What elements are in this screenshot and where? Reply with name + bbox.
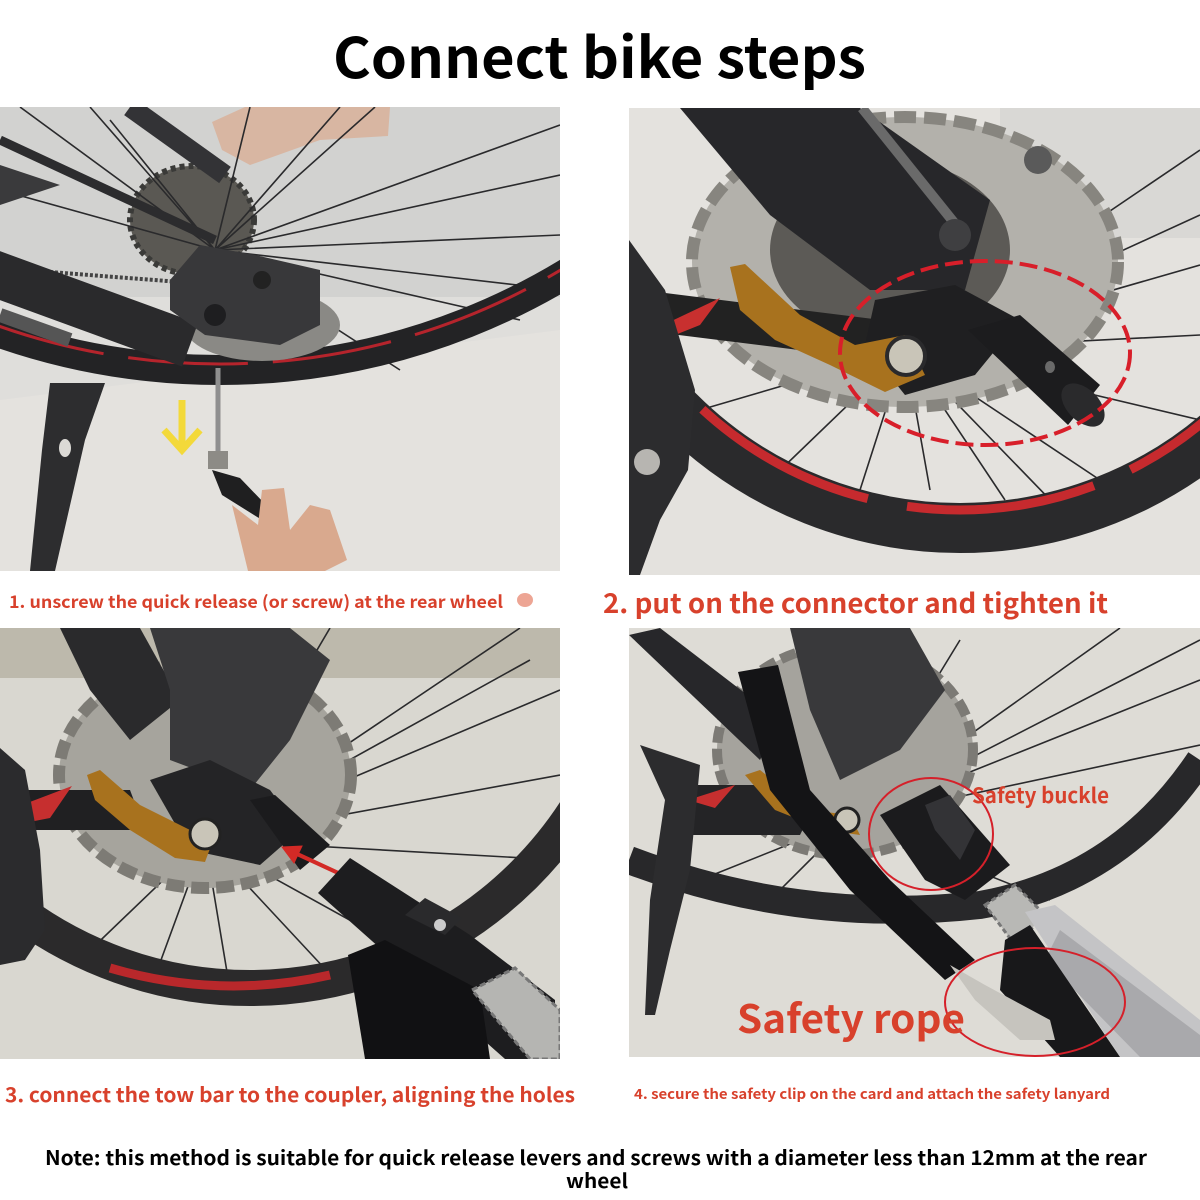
brake disc xyxy=(192,301,340,361)
label: safety rope: Safety rope xyxy=(737,989,965,1045)
gold lever xyxy=(87,770,215,862)
panel: step 1 photo xyxy=(0,107,560,571)
caption: step 1: 1. unscrew the quick release (or screw) at the rear wheel xyxy=(9,588,503,613)
velcro strap xyxy=(348,940,490,1059)
spokes xyxy=(0,107,560,370)
cassette sprocket xyxy=(130,166,254,274)
gold lever xyxy=(745,770,860,835)
kickstand xyxy=(0,748,45,965)
safety clip xyxy=(406,898,454,935)
note: Note: this method is suitable for quick release levers and screws with a diameter less than 12mm at the rear xyxy=(45,1142,1147,1171)
chain xyxy=(50,272,180,282)
quick release skewer xyxy=(208,368,290,530)
note xyxy=(45,1142,1147,1194)
gold lever xyxy=(730,264,925,392)
title: Connect bike steps xyxy=(333,14,866,95)
connector and buckle xyxy=(880,785,1010,900)
caption: step 2: 2. put on the connector and tighten it xyxy=(603,582,1108,621)
frame and caliper xyxy=(629,628,780,760)
red circle: rope xyxy=(945,948,1125,1056)
caption: step 3: 3. connect the tow bar to the coupler, aligning the holes xyxy=(5,1079,575,1108)
safety strap xyxy=(738,665,975,980)
kickstand xyxy=(30,383,105,571)
tow bar xyxy=(318,858,555,1059)
caliper and frame xyxy=(60,628,180,740)
safety hook xyxy=(950,965,1055,1040)
tyre xyxy=(689,392,1200,553)
spring xyxy=(472,968,560,1059)
note: wheel xyxy=(566,1165,628,1194)
lower strap xyxy=(1000,925,1120,1057)
brake disc xyxy=(692,117,1118,407)
upper arc xyxy=(130,107,225,175)
yellow arrow xyxy=(164,400,200,450)
red dashed highlight xyxy=(840,261,1130,445)
tyre xyxy=(35,802,560,1006)
red arrow xyxy=(281,846,338,874)
kickstand xyxy=(629,240,695,575)
panel: step 2 photo xyxy=(629,108,1200,575)
aluminium tow bar xyxy=(1025,905,1200,1057)
decorative smudge xyxy=(517,593,533,607)
brake disc xyxy=(59,662,351,888)
spokes xyxy=(700,628,1200,900)
brake disc xyxy=(717,645,973,855)
spokes xyxy=(80,628,560,990)
panel: step 3 photo xyxy=(0,628,560,1059)
kickstand xyxy=(640,745,700,1015)
tyre xyxy=(0,260,560,385)
spring xyxy=(985,885,1045,945)
tyre xyxy=(629,760,1200,910)
hand holding the wheel xyxy=(212,107,390,165)
spokes xyxy=(700,150,1200,510)
hand holding lever xyxy=(232,488,347,571)
brake caliper xyxy=(170,245,320,345)
frame xyxy=(680,108,990,290)
label: safety buckle: Safety buckle xyxy=(972,780,1109,810)
chain stay xyxy=(0,272,190,345)
connector xyxy=(870,285,1105,427)
caption: step 4: 4. secure the safety clip on the card and attach the safety lanyard xyxy=(634,1084,1110,1104)
coupler stub xyxy=(250,795,330,870)
red circle: buckle xyxy=(869,778,993,890)
panel: step 4 photo xyxy=(629,628,1200,1057)
stay tube xyxy=(640,310,880,340)
